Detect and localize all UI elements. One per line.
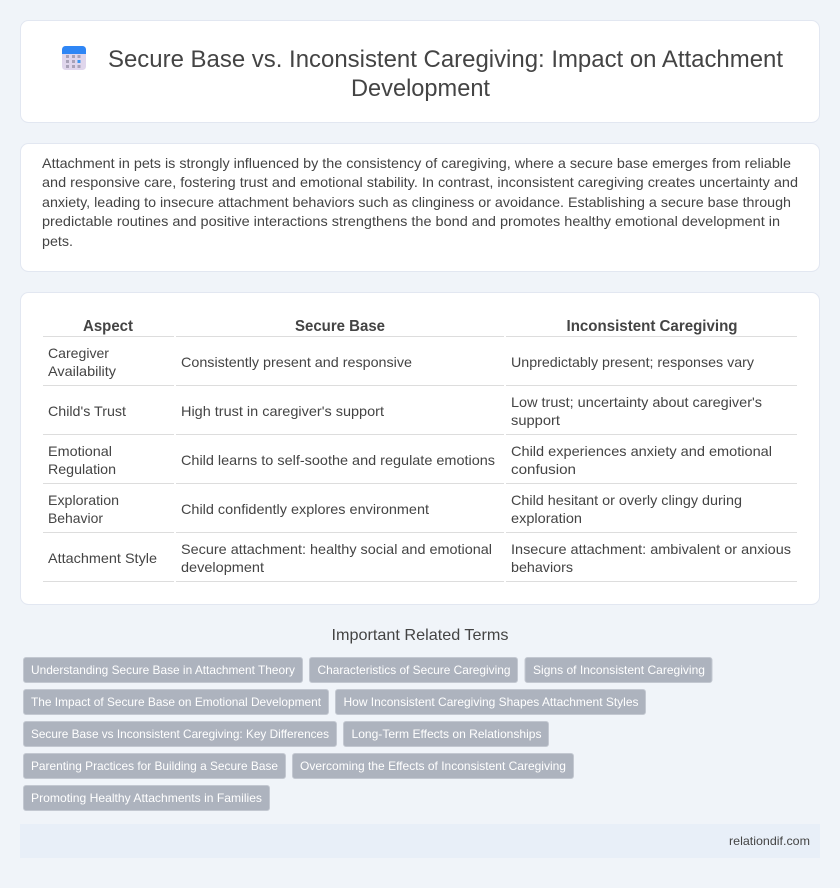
tag: Parenting Practices for Building a Secure Base xyxy=(31,759,278,773)
title: Development xyxy=(351,75,490,102)
text block: introduction paragraph: Attachment in pets is strongly influenced by the consistency of caregiving, where a secure base emerges from reliable xyxy=(42,155,791,171)
text block: introduction paragraph: pets. xyxy=(42,233,73,249)
row: caregiver availability: Unpredictably present; responses vary xyxy=(511,354,754,370)
tag xyxy=(310,658,518,682)
row: emotional regulation: Child learns to self-soothe and regulate emotions xyxy=(181,452,495,468)
tag xyxy=(24,786,270,810)
tag: Signs of Inconsistent Caregiving xyxy=(533,663,705,677)
row: child's trust: High trust in caregiver's support xyxy=(181,403,384,419)
tag xyxy=(24,754,286,778)
row: attachment style: behaviors xyxy=(511,559,573,575)
text block: introduction paragraph xyxy=(42,155,798,249)
row: attachment style xyxy=(48,541,791,575)
footer xyxy=(20,824,820,858)
row: exploration behavior: Behavior xyxy=(48,510,103,526)
tag: Secure Base vs Inconsistent Caregiving: Key Differences xyxy=(31,727,329,741)
tag: Promoting Healthy Attachments in Families xyxy=(31,791,262,805)
title xyxy=(108,46,783,102)
text block: introduction paragraph: and responsive care, fostering trust and emotional stability. In contrast, inconsistent caregiving creates uncertainty and xyxy=(42,174,798,190)
row: child's trust: support xyxy=(511,412,560,428)
tag: The Impact of Secure Base on Emotional Development xyxy=(31,695,322,709)
panel: title header xyxy=(20,20,820,122)
row: child's trust: Child's Trust xyxy=(48,403,126,419)
tag xyxy=(24,722,336,746)
row: caregiver availability: Consistently present and responsive xyxy=(181,354,412,370)
title: Secure Base vs. Inconsistent Caregiving: Impact on Attachment xyxy=(108,46,783,73)
tag xyxy=(344,722,548,746)
row: exploration behavior: Exploration xyxy=(48,492,119,508)
row: emotional regulation xyxy=(48,443,772,477)
tag xyxy=(336,690,646,714)
text block: introduction paragraph: predictable routines and positive interactions strengthens the bond and promotes healthy emotional development in xyxy=(42,213,780,229)
panel: introduction xyxy=(20,144,820,272)
row: exploration behavior: Child confidently explores environment xyxy=(181,501,429,517)
row: exploration behavior: Child hesitant or overly clingy during xyxy=(511,492,742,508)
row: emotional regulation: Child experiences anxiety and emotional xyxy=(511,443,772,459)
row: attachment style: development xyxy=(181,559,264,575)
icon: calendar xyxy=(62,46,86,70)
footer source text: relationdif.com xyxy=(729,834,810,848)
table header: Aspect xyxy=(83,318,134,335)
row: child's trust: Low trust; uncertainty about caregiver's xyxy=(511,394,762,410)
row: emotional regulation: confusion xyxy=(511,461,576,477)
row: caregiver availability: Availability xyxy=(48,363,116,379)
row: caregiver availability xyxy=(48,345,754,379)
tag: How Inconsistent Caregiving Shapes Attachment Styles xyxy=(344,695,638,709)
tag list: related terms xyxy=(24,658,712,810)
table header: Inconsistent Caregiving xyxy=(566,318,738,335)
row: attachment style: Secure attachment: healthy social and emotional xyxy=(181,541,492,557)
row: child's trust xyxy=(48,394,762,428)
row: caregiver availability: Caregiver xyxy=(48,345,109,361)
row: emotional regulation: Emotional xyxy=(48,443,112,459)
table header xyxy=(83,318,738,335)
table header: Secure Base xyxy=(295,318,385,335)
panel: comparison table xyxy=(20,292,820,604)
tag: Overcoming the Effects of Inconsistent Caregiving xyxy=(300,759,566,773)
row: attachment style: Attachment Style xyxy=(48,550,157,566)
tag xyxy=(525,658,712,682)
tag xyxy=(24,690,328,714)
row: attachment style: Insecure attachment: ambivalent or anxious xyxy=(511,541,791,557)
tag xyxy=(24,658,302,682)
tag: Long-Term Effects on Relationships xyxy=(352,727,542,741)
row: exploration behavior: exploration xyxy=(511,510,582,526)
tag: Understanding Secure Base in Attachment Theory xyxy=(31,663,295,677)
tag: Characteristics of Secure Caregiving xyxy=(318,663,510,677)
text block: introduction paragraph: anxiety, leading to insecure attachment behaviors such as clinginess or avoidance. Establishing a secure base through xyxy=(42,194,791,210)
heading: important related terms: Important Related Terms xyxy=(332,627,508,644)
row: exploration behavior xyxy=(48,492,742,526)
row: emotional regulation: Regulation xyxy=(48,461,116,477)
tag xyxy=(292,754,574,778)
